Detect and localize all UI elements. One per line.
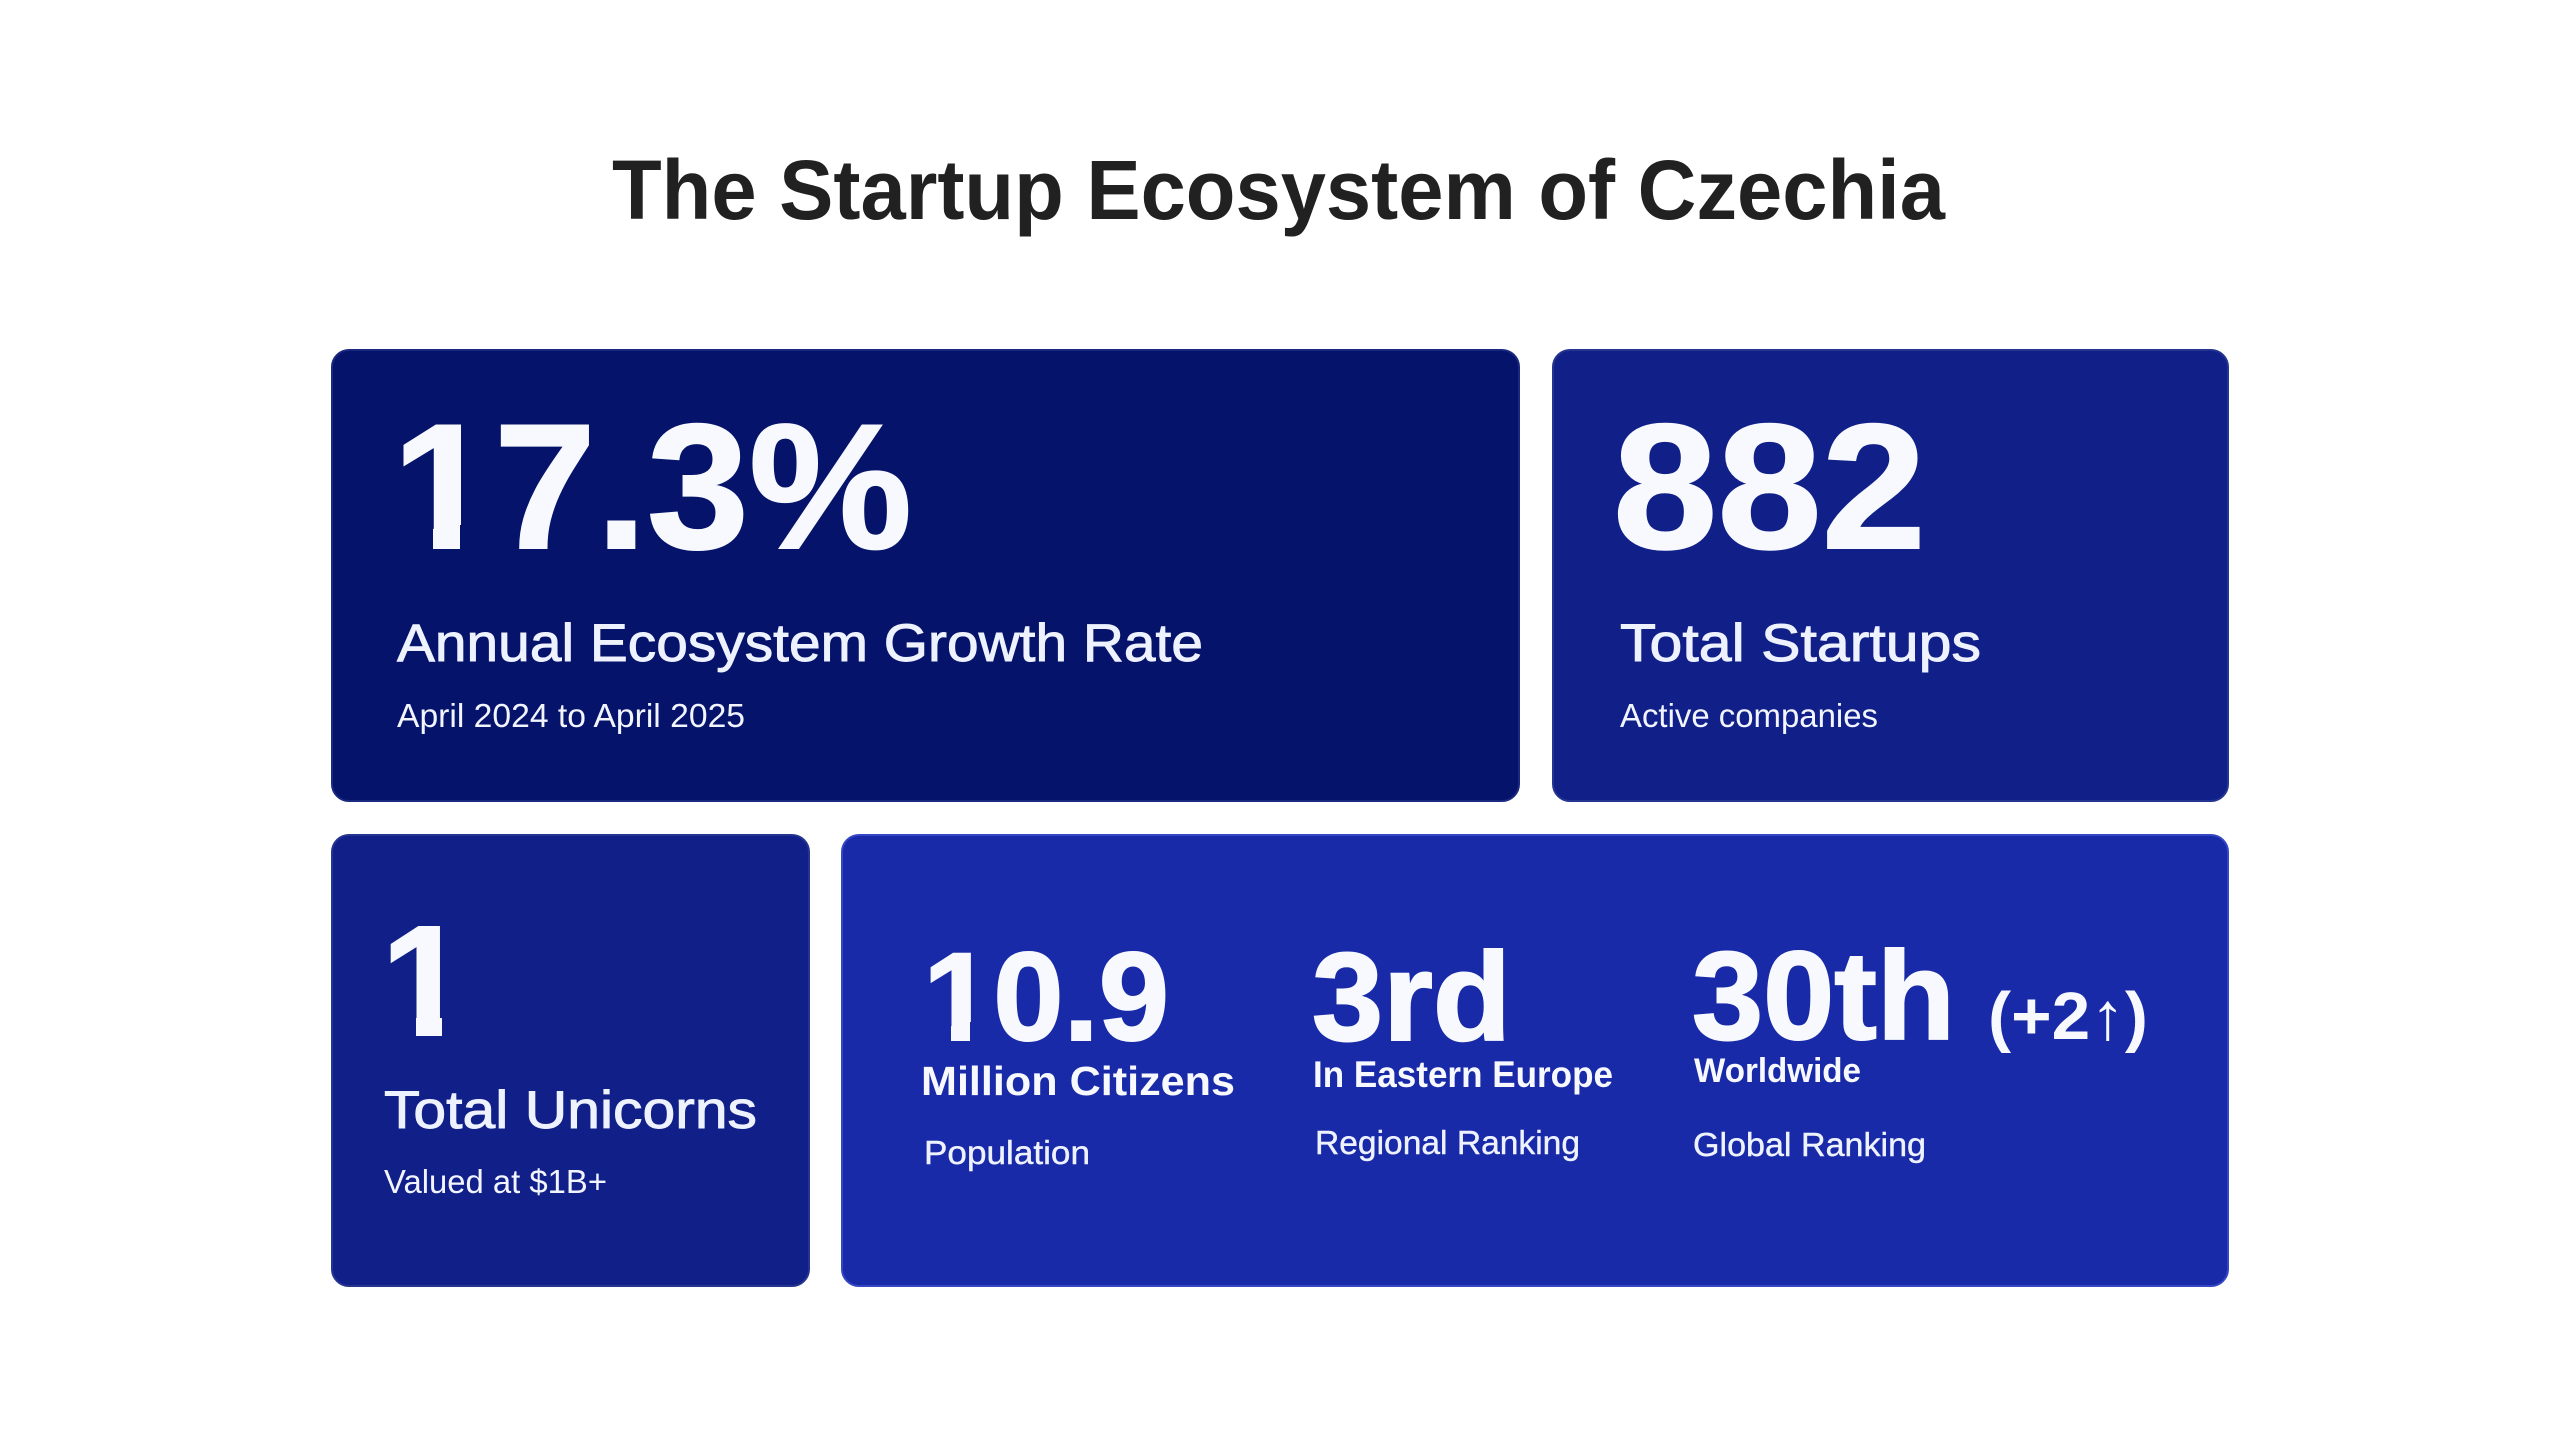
label: worldwide: Worldwide <box>1694 1052 1861 1090</box>
label: in eastern europe: In Eastern Europe <box>1313 1054 1613 1095</box>
stat: population <box>924 951 1234 1172</box>
label: million citizens: Million Citizens <box>921 1058 1235 1104</box>
stat: regional ranking <box>1312 928 1613 1161</box>
label: total unicorns: Total Unicorns <box>384 1081 757 1140</box>
big number: 30th: 30th <box>1692 927 1955 1066</box>
panel: total startups <box>1553 350 2228 801</box>
panel: annual growth rate <box>332 350 1519 801</box>
big number: 3rd: 3rd <box>1312 928 1511 1067</box>
panel background: growth rate <box>332 350 1519 801</box>
note: valued at $1B+: Valued at $1B+ <box>384 1163 607 1200</box>
note: population: Population <box>924 1134 1090 1171</box>
note: active companies: Active companies <box>1620 697 1878 734</box>
title: The Startup Ecosystem of Czechia <box>612 143 1946 237</box>
big number: 882: 882 <box>1613 387 1926 586</box>
big number: 10.9: 10.9 <box>923 928 1169 1067</box>
panel: total unicorns <box>332 835 809 1286</box>
note: regional ranking: Regional Ranking <box>1315 1124 1580 1161</box>
label: annual ecosystem growth rate: Annual Ecosystem Growth Rate <box>397 614 1203 673</box>
panel: population and rankings <box>842 835 2228 1286</box>
note: date range: April 2024 to April 2025 <box>397 697 745 734</box>
stat: global ranking <box>1692 927 2148 1163</box>
panel background: population and rankings <box>842 835 2228 1286</box>
panel background: total unicorns <box>332 835 809 1286</box>
note: global ranking: Global Ranking <box>1693 1126 1926 1163</box>
rank change: +2 up: (+2↑) <box>1988 979 2148 1054</box>
big number: 17.3%: 17.3% <box>392 387 912 586</box>
big number: 1: 1 <box>381 894 468 1069</box>
panel background: total startups <box>1553 350 2228 801</box>
label: total startups: Total Startups <box>1620 614 1981 673</box>
